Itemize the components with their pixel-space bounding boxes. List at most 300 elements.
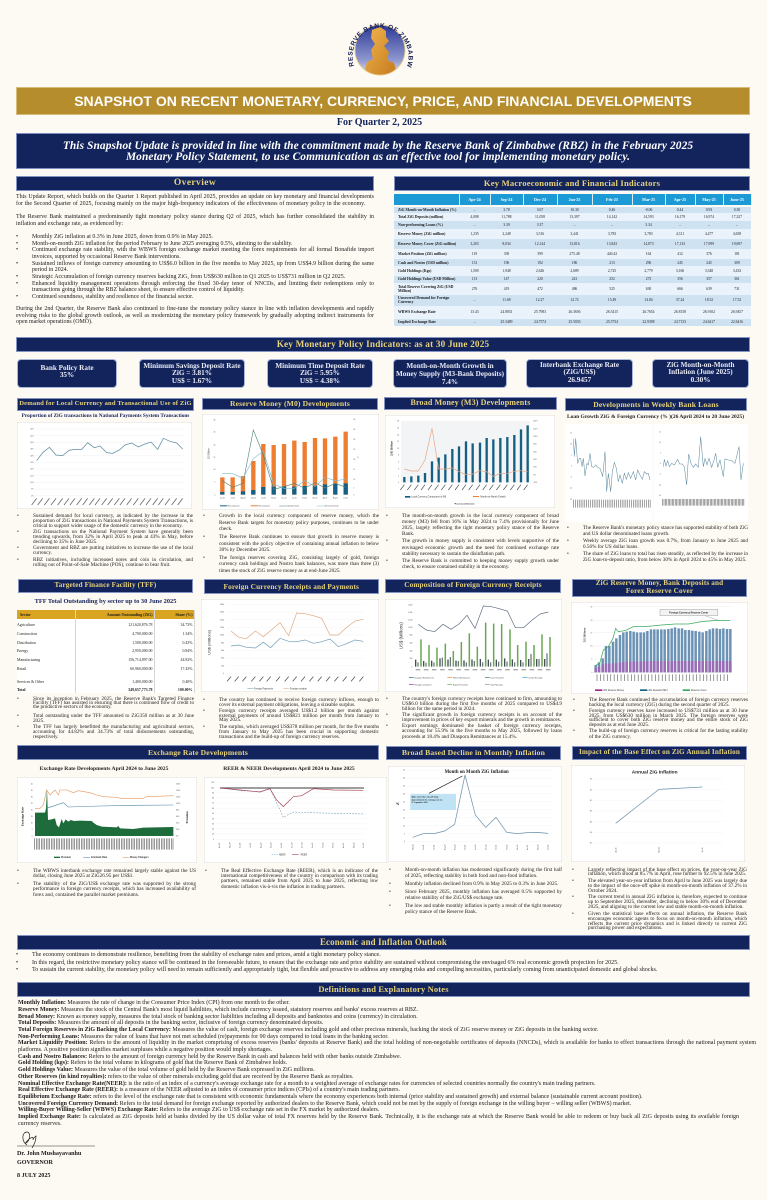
text: reserve money bullets — [203, 513, 379, 574]
text: weekly bank loans bullets: The share of ZiG loans to total has risen steadily, as reflected by the increase in ZiG loan-to-deposit ratio, from below 30% in April 2024 to 45% in May 2025. — [583, 551, 748, 563]
text: composition bullets: Export earnings dominated the basket of foreign currency receipts, accounting for 55.9% in the five months to May 2025, followed by loans proceeds at 18.4% and Diaspora Remittances at 15.4%. — [402, 723, 562, 740]
line chart: annual ZiG inflation: 94 — [590, 779, 592, 781]
panel: composition of foreign currency receipts — [385, 579, 562, 740]
table: indicators: Dec-24 — [534, 196, 546, 202]
table: indicators: 11,788 — [501, 215, 512, 219]
combo chart: broad money bars and growth line: 80% — [533, 444, 537, 446]
combo chart: broad money bars and growth line: 14 — [397, 434, 399, 436]
card: interbank exchange rate: (ZiG/US$) — [564, 368, 595, 376]
line chart: ZiG share of NPS transactions: 40% — [30, 442, 34, 444]
table: indicators: 196 — [504, 261, 509, 265]
line chart: ZiG share of NPS transactions: 0% — [31, 495, 34, 497]
table: indicators: 412 — [677, 252, 683, 256]
line chart: foreign payments versus receipts: 1,000 — [220, 635, 224, 637]
table: TFF by sector: Retail — [17, 667, 26, 671]
panel: broad money — [384, 397, 559, 570]
table: TFF by sector: 100.00% — [178, 688, 192, 692]
combo chart: reserve money bars and growth lines — [202, 414, 379, 510]
text: definitions list: Nominal Effective Exchange Rate(NEER): is the ratio of an index of a currency's average exchange rate for a month to a weighted average of exchange rates for currencies of selected countries normally the country's main trading partners. — [18, 1081, 595, 1087]
line chart: month on month ZiG inflation: Jun-24 — [423, 845, 425, 850]
card: minimum savings deposit rate — [139, 359, 245, 388]
line chart: month on month ZiG inflation: 35 — [403, 786, 405, 788]
heading: composition: Composition of Foreign Currency Receipts — [404, 581, 542, 589]
combo chart: broad money bars and growth line: -20% — [533, 482, 538, 484]
combo chart: reserve money bars and growth lines: Aug-24 — [241, 496, 246, 499]
table: indicators: 37.24 — [676, 298, 684, 302]
text: base effect bullets: Given the statistical base effects on annual inflation, the Reserve Bank encourages economic agents to focus on month-on-month inflation, which reflects the current price dynamics and is linked directly to current ZiG purchasing power and expectations. — [588, 911, 747, 931]
text: weekly bank loans bullets: The Reserve Bank's monetary policy stance has supported stability of both ZiG and US dollar denominated loans growth. — [583, 525, 748, 537]
table: TFF by sector: Total — [17, 688, 26, 692]
combo chart: composition of receipts: NGOs Remittances — [453, 676, 470, 679]
line chart: month on month ZiG inflation: Dec-24 — [485, 845, 487, 850]
combo chart: broad money bars and growth line: 12 — [397, 441, 399, 443]
table: indicators: 186 — [572, 261, 577, 265]
line chart: annual ZiG inflation: Jun-25 — [702, 847, 704, 853]
card: minimum savings deposit rate: ZiG = 3.81% — [172, 369, 212, 377]
combo chart: composition of receipts: Diaspora Remittances — [414, 676, 434, 679]
text: outlook bullets: The economy continues to demonstrate resilience, benefiting from the stability of exchange rates and prices, amid a tight monetary policy stance. — [32, 952, 381, 958]
combo chart: composition of receipts: Income Receipts — [528, 676, 543, 679]
card: interbank exchange rate: 26.9457 — [568, 376, 591, 384]
line chart: month on month ZiG inflation: 45 — [403, 770, 405, 772]
combo chart: reserve money bars and growth lines: Jan-25 — [292, 497, 297, 499]
table: TFF by sector: Manufacturing — [17, 658, 40, 662]
title banner — [16, 87, 750, 115]
combo chart: exchange rates and premium: 0 — [32, 836, 33, 838]
table: indicators: – — [611, 223, 613, 227]
line chart: month on month ZiG inflation: Month on Month ZiG Inflation — [445, 770, 509, 775]
heading: foreign currency receipts and payments: Foreign Currency Receipts and Payments — [223, 582, 359, 591]
line chart: month on month ZiG inflation: 15 — [403, 817, 405, 819]
table: indicators: 3.39 — [503, 223, 510, 227]
intro statement banner — [16, 133, 750, 169]
heading: targeted finance facility: Targeted Finance Facility (TFF) — [55, 581, 156, 589]
table: indicators: 12.72 — [570, 298, 579, 302]
combo chart: exchange rates and premium: Exchange Rate — [20, 806, 24, 826]
combo chart: reserve money bars and growth lines: Nov-24 — [271, 497, 276, 499]
heading: key monetary policy indicators: Key Monetary Policy Indicators: as at 30 June 2025 — [277, 339, 489, 349]
text: exchange rate bullets — [17, 868, 196, 898]
table: indicators: 24.8831 — [500, 310, 512, 314]
line chart: REER and NEER: 110 — [211, 782, 214, 784]
combo chart: broad money bars and growth line: 10 — [397, 448, 399, 450]
combo chart: broad money bars and growth line: 40% — [533, 459, 537, 461]
combo chart: composition of receipts: 0 — [411, 666, 412, 668]
table: indicators: 241 — [572, 277, 577, 281]
line chart: annual ZiG inflation: 90 — [590, 800, 592, 802]
line chart: annual ZiG inflation: 92 — [590, 789, 592, 791]
table: indicators: June-25 — [730, 196, 744, 202]
combo chart: reserve money bars and growth lines: 10 — [353, 479, 355, 481]
chart subtitle: REER and NEER: REER & NEER Developments April 2024 to June 2025 — [223, 766, 355, 772]
table: indicators: 113 — [472, 277, 477, 281]
table: indicators: 24.6417 — [703, 320, 715, 324]
table: TFF by sector: 2,950,000.00 — [132, 649, 152, 653]
table: indicators: 19,697 — [732, 242, 742, 246]
card: month-on-month growth in money supply: 7.4% — [442, 378, 458, 386]
heading: exchange rate developments — [17, 745, 379, 760]
table: indicators: 25.5734 — [606, 320, 618, 324]
line chart: foreign currency loan growth: 5 — [660, 452, 661, 454]
line chart: foreign payments versus receipts: 0 — [223, 673, 224, 675]
text: definitions list: Cash and Nostro Balances: Refers to the amount of foreign currency held by the Reserve Bank in cash and balances held with other banks outside Zimbabwe. — [18, 1054, 401, 1060]
line chart: ZiG loan growth: 0 — [571, 466, 572, 468]
heading: ZiG reserve money and cover — [572, 579, 747, 597]
table: indicators: 4,658 — [733, 232, 741, 236]
intro statement banner: Monetary Policy Statement, to use Communication as an effective tool for implementing monetary policy. — [126, 151, 630, 163]
combo chart: reserve money, deposits, reserve cover: Reserve Cover — [691, 689, 707, 692]
line chart: REER and NEER: 100 — [211, 787, 214, 789]
combo chart: reserve money bars and growth lines: 35 — [353, 429, 355, 431]
combo chart: broad money bars and growth line: 20% — [533, 467, 537, 469]
combo chart: reserve money bars and growth lines: 5 — [214, 481, 215, 483]
combo chart: reserve money bars and growth lines: Feb-25 — [302, 497, 307, 499]
line chart: REER and NEER: Sep-24 — [271, 843, 273, 848]
heading: outlook — [17, 935, 750, 950]
table: indicators: Apr-25 — [674, 196, 686, 202]
text: composition bullets: The country's foreign currency receipts have continued to firm, amounting to US$6.0 billion during the first five months of 2025 compared to US$4.9 billion for the same period in 2024. — [402, 696, 562, 712]
table: indicators: 4,098 — [470, 215, 479, 219]
text: TFF bullets: The TFF has largely benefitted the manufacturing and agricultural sectors, accounting for 44.82% and 34.73% of total disbursements outstanding, respectively. — [33, 724, 194, 740]
text: monthly inflation bullets — [389, 867, 562, 915]
table: indicators: Gold Holdings Value (USD Million) — [398, 277, 455, 281]
combo chart: composition of receipts: Total Receipts — [490, 684, 503, 687]
table: indicators: 399 — [537, 252, 543, 256]
combo chart: exchange rates and premium: 0% — [176, 836, 179, 838]
line chart: annual ZiG inflation: Annual ZiG Inflation — [632, 769, 678, 775]
heading: composition — [385, 579, 561, 593]
combo chart: reserve money bars and growth lines: Oct-24 — [261, 496, 266, 499]
combo chart: reserve money bars and growth lines: 10 — [213, 469, 215, 471]
text: definitions list: Other Reserves (in kind royalties): refers to the value of other minerals excluding gold that are received by the Reserve Bank as royalties. — [18, 1074, 354, 1080]
text: definitions list: Willing-Buyer Willing-Seller (WBWS) Exchange Rate: Refers to the average ZiG to US$ exchange rate set in the FX market by authorized dealers. — [18, 1107, 379, 1113]
text: exchange rate bullets: The stability of the ZiG/US$ exchange rate was supported by the strong performance in foreign currency receipts, which has increased availability of forex and, contained the parallel market premiums. — [33, 881, 196, 898]
combo chart: reserve money, deposits, reserve cover: 25 — [590, 606, 592, 608]
line chart: month on month ZiG inflation: 10 — [403, 825, 405, 827]
line chart: month on month ZiG inflation: depreciation in the exchange rate on — [411, 798, 443, 801]
line chart: REER and NEER: Nov-24 — [291, 843, 293, 848]
combo chart: exchange rates and premium: 120% — [176, 797, 181, 799]
subtitle: quarter: For Quarter 2, 2025 — [337, 117, 422, 128]
table: indicators: 440.42 — [607, 252, 617, 256]
table: indicators: Implied Exchange Rate — [398, 320, 436, 324]
combo chart: exchange rates and premium — [17, 777, 197, 863]
combo chart: composition of receipts: 1,000 — [408, 627, 412, 629]
table: indicators: 164 — [646, 252, 651, 256]
combo chart: exchange rates and premium: 60% — [176, 816, 180, 818]
line chart: REER and NEER: 60 — [212, 808, 214, 810]
text: definitions list: Broad Money: Known as money supply, measures the total stock of banking sector liabilities including all deposits and banknotes and coins (currency) in circulation. — [18, 1014, 418, 1020]
table: indicators: 4,477 — [705, 232, 713, 236]
table: indicators: 1,500 — [470, 269, 479, 273]
line chart: ZiG loan growth: 15 — [570, 432, 572, 434]
line chart: ZiG share of NPS transactions: 5% — [31, 489, 34, 491]
heading: outlook: Economic and Inflation Outlook — [320, 937, 447, 947]
text: ZiG reserve bullets: The build-up of foreign currency reserves is critical for the lasting stability of the ZiG currency. — [589, 728, 748, 740]
combo chart: exchange rates and premium: 30 — [31, 797, 33, 799]
text: governor name and date: 8 JULY 2025 — [17, 1173, 50, 1179]
panel: weekly bank loans — [565, 398, 748, 563]
table: indicators: 26.7654 — [642, 310, 654, 314]
table: TFF by sector: Sector — [20, 612, 31, 616]
table: indicators: 26.5415 — [606, 310, 618, 314]
table: indicators: Gold Holdings (Kgs) — [398, 269, 431, 273]
text: outlook bullets: In this regard, the restrictive monetary policy stance will be continued in the foreseeable future, to ensure that the exchange rate and price stability are sustained without compromising the envisaged 6% real economic growth projection for 2025. — [32, 960, 619, 966]
line chart: ZiG share of NPS transactions: 15% — [30, 475, 34, 477]
text: broad money bullets — [386, 512, 559, 570]
table: indicators: 2,779 — [644, 269, 653, 273]
line chart: month on month ZiG inflation: 27 September 2024 — [411, 802, 428, 804]
combo chart: exchange rates and premium: Premium — [61, 857, 71, 859]
line chart: month on month ZiG inflation: Apr-25 — [526, 845, 529, 850]
table: indicators: 12.27 — [536, 298, 544, 302]
text: demand bullets: ZiG transactions on the National Payment System have generally been trending upwards, from 32% in April 2025 to peak at 43% in May, before declining to 35% in June 2025. — [33, 529, 193, 545]
combo chart: composition of receipts: Export Proceeds — [453, 684, 468, 687]
card: minimum time deposit rate: US$ = 4.38% — [300, 377, 340, 385]
heading: key monetary policy indicators — [16, 337, 750, 352]
line chart: REER and NEER: NEER — [279, 854, 286, 856]
combo chart: composition of receipts: 200 — [410, 658, 412, 660]
text: definitions list: Monthly Inflation: Measures the rate of change in the Consumer Price Index (CPI) from one month to the other. — [18, 1000, 290, 1006]
text: definitions list: Total Foreign Reserves in ZiG Backing the Local Currency: Measures the value of cash, foreign exchange reserves including gold and other precious minerals, backing the stock of ZiG reserve money or ZiG deposits in the banking sector. — [18, 1027, 598, 1033]
table: indicators: 275.48 — [569, 252, 580, 256]
combo chart: broad money bars and growth line: Month-on-Month Growth — [480, 496, 506, 499]
line chart: month on month ZiG inflation: Jul-24 — [434, 845, 436, 850]
line chart: foreign currency loan growth: 10 — [659, 442, 661, 444]
combo chart: reserve money, deposits, reserve cover: ZiG Reserve Money — [603, 689, 625, 692]
text: base effect bullets: The elevated year-on-year inflation from April to June 2025 was largely due to the impact of the once-off spike in month-on-month inflation of 37.2% in October 2024. — [588, 878, 747, 894]
combo chart: exchange rates and premium: 25 — [31, 803, 33, 805]
line chart: ZiG share of NPS transactions: 30% — [30, 455, 34, 457]
line chart: foreign payments versus receipts: 1,600 — [220, 612, 224, 614]
card: minimum time deposit rate: Minimum Time Deposit Rate — [275, 362, 365, 370]
table: TFF by sector: 34.73% — [180, 623, 192, 627]
line chart: foreign payments versus receipts: 400 — [221, 658, 224, 660]
heading: indicators: Key Macroeconomic and Financial Indicators — [484, 178, 660, 188]
text: definitions list: Real Effective Exchange Rate (REER): is a measure of the NEER adjusted to an index of consumer price indices (CPIs) of a country's main trading partners. — [18, 1087, 400, 1093]
combo chart: reserve money, deposits, reserve cover: ZiG Billions — [582, 627, 586, 642]
text: overview bullets: Strategic Accumulation of foreign currency reserves backing ZiG, from US$630 million in Q1 2025 to US$731 million in Q2 2025. — [32, 274, 345, 280]
combo chart: reserve money, deposits, reserve cover: ZiG Deposits (Mln) — [648, 689, 668, 692]
text: definitions list: Equilibrium Exchange Rate: refers to the level of the exchange rate that is consistent with economic fundamentals where the economy experiences both internal (price stability and sustained growth) and external balance (sustainable current account position). — [18, 1094, 642, 1100]
table: indicators: Mar-25 — [642, 196, 655, 202]
combo chart: reserve money bars and growth lines: Jun-24 — [220, 497, 225, 499]
text: monthly inflation bullets: Since February 2025, monthly inflation has averaged 0.5% supported by relative stability of the ZiG/US$ exchange rate. — [405, 889, 562, 901]
combo chart: reserve money bars and growth lines: 20 — [353, 459, 355, 461]
text: definitions list — [18, 1000, 750, 1127]
combo chart: reserve money bars and growth lines: Jun-25 — [343, 497, 348, 499]
line chart: foreign currency loan growth — [654, 424, 748, 522]
text: ZiG reserve bullets: Foreign currency reserves have increased to US$731 million as at 30 June 2025, from US$630 million in March 2025. The foreign reserves were sufficient to cover both ZiG reserve money and the entire stock of ZiG deposits as at end June 2025. — [589, 708, 748, 728]
line chart: REER and NEER: Oct-24 — [280, 843, 283, 848]
text: definitions list: Reserve Money: Measures the stock of the Central Bank's most liquid liabilities, which include currency issued, statutory reserves and banks' excess reserves at RBZ. — [18, 1007, 418, 1013]
heading: broad money — [384, 397, 557, 410]
combo chart: reserve money bars and growth lines: 20 — [213, 445, 215, 447]
combo chart: composition of receipts — [385, 599, 562, 692]
table: indicators: 276 — [472, 287, 477, 291]
table: indicators: 12,144 — [535, 242, 545, 246]
text: reserve money bullets: The Reserve Bank continues to ensure that growth in reserve money is consistent with the policy objective of containing annual inflation to below 30% by December 2025. — [219, 534, 379, 553]
line chart: REER and NEER: Jan-25 — [312, 843, 314, 848]
combo chart: broad money bars and growth line: 4 — [398, 468, 399, 470]
table: indicators: Market Position (ZiG million) — [398, 252, 447, 256]
heading: base effect — [572, 746, 747, 760]
line chart: REER and NEER: Jul-24 — [250, 843, 252, 848]
table: indicators: 3,348 — [705, 269, 713, 273]
line chart: month on month ZiG inflation: Spike caused by a one-off sharp — [411, 797, 439, 799]
text: overview bullets: Month-on-month ZiG inflation for the period February to June 2025 averaging 0.5%, attesting to the stability. — [32, 241, 292, 247]
panel: key monetary policy indicators — [16, 337, 750, 388]
combo chart: exchange rates and premium: Interbank Rate — [91, 856, 108, 859]
line chart: ZiG share of NPS transactions: 35% — [30, 449, 34, 451]
line chart: foreign payments versus receipts: 600 — [221, 650, 224, 652]
table: indicators: 486 — [572, 287, 577, 291]
heading: reserve money — [202, 398, 378, 410]
line chart: month on month ZiG inflation: Jun-25 — [548, 845, 550, 850]
text: base effect bullets: Largely reflecting impact of the base effect on prices, the year-on-year ZiG inflation, which stood at 85.7% in April, rose further to 92.5% in June 2025. — [588, 866, 747, 877]
line chart: month on month ZiG inflation: 40 — [403, 778, 405, 780]
panel: broad based decline in monthly inflation — [386, 746, 562, 915]
table: indicators: 3,166 — [676, 269, 684, 273]
combo chart: exchange rates and premium: 15 — [31, 816, 33, 818]
card: minimum time deposit rate — [267, 359, 373, 388]
card: month-on-month growth in money supply: Money Supply (M3-Bank Deposits) — [396, 370, 504, 378]
table: indicators: – — [474, 298, 475, 302]
text: exchange rate bullets: The WBWS interbank exchange rate remained largely stable against the US dollar, closing June 2025 at ZiG26.95 per US$1. — [33, 868, 196, 879]
text: ZiG reserve bullets — [573, 696, 748, 740]
panel: impact of the base effect on annual inflation — [571, 746, 747, 931]
table: indicators: 0.93 — [706, 208, 712, 212]
text: governor name and date: GOVERNOR — [17, 1160, 53, 1166]
heading: broad based decline: Broad Based Decline in Monthly Inflation — [402, 748, 545, 757]
combo chart: broad money bars and growth line: 8 — [398, 455, 399, 457]
line chart: month on month ZiG inflation: Nov-24 — [475, 845, 477, 850]
line chart: ZiG loan growth: 5 — [571, 454, 572, 456]
line chart: month on month ZiG inflation: Aug-24 — [443, 845, 446, 850]
line chart: ZiG share of NPS transactions: 50% — [30, 429, 34, 431]
combo chart: exchange rates and premium: Money Changers — [130, 857, 149, 859]
heading: base effect: Impact of the Base Effect on ZiG Annual Inflation — [579, 748, 740, 756]
combo chart: reserve money bars and growth lines: Annualised Growth — [325, 505, 339, 508]
heading: exchange rate developments: Exchange Rate Developments — [148, 748, 248, 757]
table: indicators: 13,397 — [569, 215, 580, 219]
heading: ZiG reserve money and cover: ZiG Reserve Money, Bank Deposits and — [596, 579, 723, 587]
text: governor name and date — [17, 1150, 107, 1182]
table title: TFF: TFF Total Outstanding by sector up to 30 June 2025 — [35, 598, 176, 605]
line chart: annual ZiG inflation: 88 — [590, 811, 592, 813]
table: indicators: 14,142 — [607, 215, 617, 219]
panel: demand for local currency — [17, 398, 194, 568]
combo chart: broad money bars and growth line: 6 — [398, 462, 399, 464]
table: indicators: 25.3489 — [500, 320, 512, 324]
line chart: month on month ZiG inflation: May-24 — [412, 844, 414, 850]
line chart: REER and NEER: Mar-25 — [333, 843, 335, 848]
intro statement banner: This Snapshot Update is provided in line with the commitment made by the Reserve Bank of Zimbabwe (RBZ) in the February 2025 — [63, 140, 693, 152]
line chart: ZiG share of NPS transactions: 20% — [30, 469, 34, 471]
text: definitions list: Uncovered Foreign Currency Demand: Refers to the total demand for foreign exchange reported by authorized dealers to the Reserve Bank, which could not be met by the supply of foreign exchange in the willing buyer – willing seller (WBWS) market. — [18, 1101, 631, 1107]
text: foreign currency bullets: The surplus, which averaged US$378 million per month, for the five months from January to May 2025 has been crucial in supporting domestic transactions and the build-up of foreign currency reserves. — [219, 724, 379, 740]
line chart: foreign payments versus receipts: 200 — [221, 665, 224, 667]
table: indicators: Sep-24 — [501, 196, 512, 202]
table: indicators: 3.78 — [503, 208, 510, 212]
heading: ZiG reserve money and cover: Forex Reserve Cover — [626, 587, 693, 595]
combo chart: composition of receipts: 600 — [410, 642, 412, 644]
text: overview intro — [16, 194, 374, 227]
text: demand bullets: Government and RBZ are putting initiatives to increase the use of the local currency. — [33, 545, 193, 556]
line chart: REER and NEER: 30 — [212, 823, 214, 825]
line chart: REER and NEER: REER — [301, 854, 307, 856]
card: ZiG month-on-month inflation: 0.30% — [691, 376, 710, 384]
table: indicators: 376 — [706, 252, 712, 256]
line chart: month on month ZiG inflation — [388, 766, 562, 862]
card: minimum savings deposit rate: US$ = 1.67% — [172, 377, 212, 385]
heading: weekly bank loans — [565, 398, 747, 411]
line chart: ZiG share of NPS transactions: 45% — [30, 435, 34, 437]
table: indicators — [394, 194, 752, 326]
table: indicators: 26.9457 — [731, 310, 743, 314]
text: TFF bullets — [17, 696, 194, 740]
card: ZiG month-on-month inflation: ZiG Month-on-Month — [666, 360, 735, 368]
text: composition bullets — [386, 696, 562, 740]
combo chart: reserve money bars and growth lines: Mar-25 — [313, 496, 318, 499]
line chart: REER and NEER — [204, 777, 387, 863]
text: reserve money bullets: The foreign reserves covering ZiG, consisting largely of gold, foreign currency cash holdings and Nostro bank balances, was more than three (3) times the stock of ZiG reserve money as at end-June 2025. — [219, 555, 379, 574]
combo chart: reserve money, deposits, reserve cover — [571, 602, 748, 694]
heading: definitions — [17, 982, 750, 997]
table: indicators: – — [679, 223, 681, 227]
combo chart: reserve money bars and growth lines: M0 Component — [228, 505, 240, 508]
table: indicators: 25.5033 — [568, 320, 580, 324]
table: indicators: Reserve Money (ZiG million) — [398, 232, 445, 236]
table: TFF by sector: 349,657,773.78 — [128, 688, 152, 692]
table: indicators: 525 — [609, 287, 615, 291]
text: overview intro: The Reserve Bank maintained a predominantly tight monetary policy stance during Q2 of 2025, which has further consolidated the stability in inflation and exchange rate, as evidenced by: — [16, 214, 374, 227]
card: ZiG month-on-month inflation — [652, 359, 749, 388]
text: definitions list: Total Deposits: Measures the amount of all deposits in the banking sector, inclusive of foreign currency denominated deposits. — [18, 1020, 323, 1026]
panel: targeted finance facility — [17, 579, 195, 740]
card: month-on-month growth in money supply — [393, 359, 507, 388]
combo chart: composition of receipts: Foreign Investment — [414, 684, 432, 687]
table: indicators: 14,593 — [643, 215, 654, 219]
combo chart: reserve money bars and growth lines: M0 Component — [259, 505, 271, 508]
table: indicators: 419 — [504, 287, 509, 291]
line chart: REER and NEER: Jun-24 — [240, 843, 242, 848]
line chart: foreign currency loan growth: 0 — [660, 463, 661, 465]
text: definitions list: Non-Performing Loans: Measures the value of loans that have not met scheduled (re)payments for 90 days compared to total loans in the banking sector. — [18, 1034, 389, 1040]
combo chart: composition of receipts: 400 — [410, 651, 412, 653]
combo chart: broad money bars and growth line: 120% — [533, 428, 538, 430]
line chart: REER and NEER: Aug-24 — [259, 843, 262, 848]
combo chart: exchange rates and premium: 10 — [31, 823, 33, 825]
table: indicators: 16,974 — [704, 215, 714, 219]
line chart: foreign payments versus receipts: 1,400 — [220, 619, 224, 621]
text: base effect bullets — [588, 868, 747, 931]
heading: definitions: Definitions and Explanatory Notes — [318, 984, 449, 994]
text: definitions list: Gold Holding (kgs): Refers to the total volume in kilograms of gold that the Reserve Bank of Zimbabwe holds. — [18, 1060, 287, 1066]
table: indicators: 3.37 — [537, 223, 543, 227]
table: TFF by sector: 0.84% — [182, 649, 192, 653]
line chart: REER and NEER: Apr-25 — [342, 843, 345, 848]
title banner: SNAPSHOT ON RECENT MONETARY, CURRENCY, PRICE, AND FINANCIAL DEVELOPMENTS — [74, 93, 692, 109]
line chart: month on month ZiG inflation: 5 — [404, 833, 405, 835]
text: monthly inflation bullets: The low and stable monthly inflation is partly a result of the tight monetary policy stance of the Reserve Bank. — [405, 903, 562, 915]
combo chart: reserve money bars and growth lines: Sep-24 — [251, 497, 256, 499]
combo chart: broad money bars and growth line: 140% — [533, 421, 538, 423]
text: broad money bullets: The growth in money supply is consistent with levels supportive of the envisaged economic growth and the need for continued exchange rate stability necessary to sustain the disinflation path. — [402, 538, 559, 557]
table: indicators: 24.7574 — [534, 320, 546, 324]
text: definitions list: Market Liquidity Position: Refers to the amount of liquidity in the market comprising of excess reserves (banks' deposits at Reserve Bank) and the total holding of non-negotiable certificates of deposits (NNCDs), which is available for banks to effect transactions through the national payment system — [18, 1040, 756, 1046]
line chart: foreign payments versus receipts: 800 — [221, 642, 224, 644]
